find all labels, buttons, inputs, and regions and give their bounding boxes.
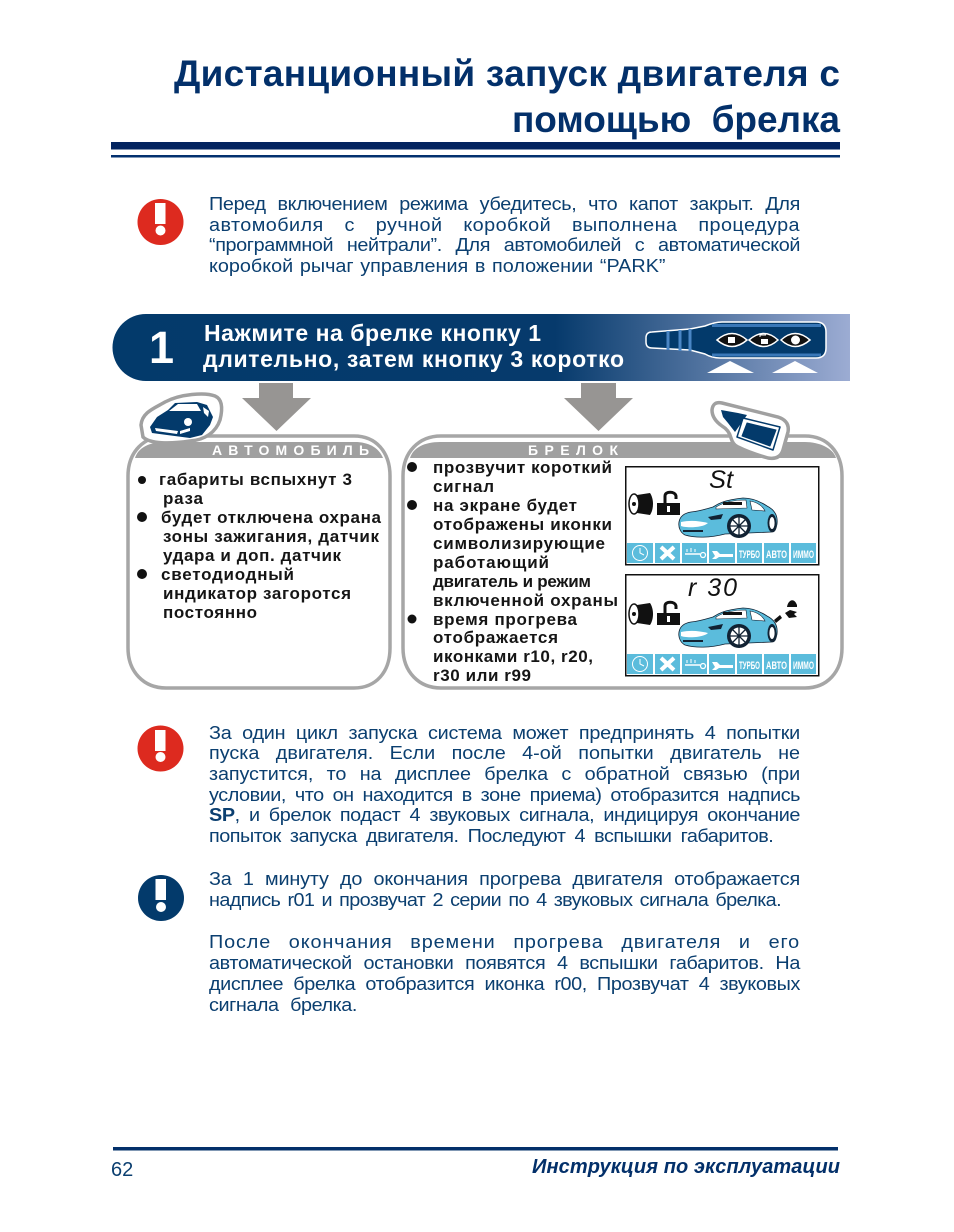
- icon: remote fob: [646, 322, 826, 358]
- bullet list: remote: сигнал: [433, 477, 494, 496]
- title: Дистанционный запуск двигателя с: [174, 53, 840, 94]
- paragraph: start attempts: пуска двигателя. Если после 4-ой попытки двигатель не: [209, 743, 800, 763]
- bullet list: remote: на экране будет: [433, 496, 577, 515]
- bullet list: remote: иконками r10, r20,: [433, 647, 593, 666]
- bullet list: car: будет отключена охрана: [161, 508, 382, 527]
- panel heading: АВТОМОБИЛЬ: [212, 442, 369, 458]
- bullet list: remote: символизирующие: [433, 534, 605, 553]
- paragraph: start attempts: За один цикл запуска система может предпринять 4 попытки: [209, 723, 800, 743]
- paragraph: end of warm-up: [209, 932, 800, 1015]
- step instruction: Нажмите на брелке кнопку 1: [204, 320, 541, 346]
- icon: car badge: [141, 394, 222, 443]
- paragraph: start attempts: попыток запуска двигателя. Последуют 4 вспышки габаритов.: [209, 826, 773, 846]
- paragraph: one minute warning: надпись r01 и прозвучат 2 серии по 4 звуковых сигнала брелка.: [209, 890, 781, 910]
- bullet list: car: удара и доп. датчик: [163, 546, 341, 565]
- panel heading: БРЕЛОК: [528, 442, 618, 458]
- bullet list: remote: [407, 458, 618, 685]
- display: St mode: St: [709, 466, 734, 494]
- display: r 30 mode: [626, 574, 819, 676]
- paragraph: safety note: Перед включением режима убедитесь, что капот закрыт. Для: [209, 194, 800, 214]
- icon: fob badge: [712, 403, 788, 458]
- button pointers: [707, 361, 818, 373]
- bullet list: remote: r30 или r99: [433, 666, 531, 685]
- arrow: to car panel: [242, 383, 311, 431]
- paragraph: end of warm-up: дисплее брелка отобразится иконка r00, Прозвучат 4 звуковых: [209, 974, 800, 994]
- paragraph: start attempts: условии, что он находится в зоне приема) отобразится надпись: [209, 785, 800, 805]
- bullet list: car: светодиодный: [161, 565, 294, 584]
- step instruction: [203, 320, 624, 372]
- paragraph: end of warm-up: автоматической остановки появятся 4 вспышки габаритов. На: [209, 953, 800, 973]
- bullet list: car: раза: [163, 489, 204, 508]
- paragraph: safety note: “программной нейтрали”. Для автомобилей с автоматической: [209, 235, 800, 255]
- display: St mode: [626, 466, 819, 565]
- paragraph: safety note: автомобиля с ручной коробкой выполнена процедура: [209, 215, 800, 235]
- bullet list: car: индикатор загоротся: [163, 584, 351, 603]
- title: [174, 53, 840, 140]
- step 1 banner: [112, 314, 850, 381]
- bullet list: remote: работающий: [433, 553, 549, 572]
- bullet list: remote: включенной охраны: [433, 591, 618, 610]
- bullet list: car: габариты вспыхнут 3: [159, 470, 352, 489]
- paragraph: safety note: коробкой рычаг управления в положении “PARK”: [209, 256, 666, 276]
- bullet list: remote: отображается: [433, 628, 558, 647]
- paragraph: one minute warning: [209, 869, 800, 910]
- title: помощью брелка: [512, 99, 840, 140]
- display: r 30 mode: r 30: [688, 574, 737, 602]
- footer: [111, 1147, 840, 1181]
- bullet list: car: зоны зажигания, датчик: [163, 527, 379, 546]
- footer caption: Инструкция по эксплуатации: [532, 1156, 840, 1178]
- paragraph: start attempts: [209, 723, 800, 846]
- bullet list: remote: прозвучит короткий: [433, 458, 612, 477]
- paragraph: end of warm-up: После окончания времени прогрева двигателя и его: [209, 932, 800, 952]
- paragraph: start attempts: SP, и брелок подаст 4 звуковых сигнала, индицируя окончание: [209, 805, 800, 825]
- paragraph: start attempts: запустится, то на дисплее брелка с обратной связью (при: [209, 764, 800, 784]
- bullet list: remote: время прогрева: [433, 610, 578, 629]
- page number: 62: [111, 1159, 133, 1181]
- bullet list: remote: отображены иконки: [433, 515, 612, 534]
- paragraph: one minute warning: За 1 минуту до окончания прогрева двигателя отображается: [209, 869, 800, 889]
- panel: car: [128, 436, 390, 688]
- bullet list: car: постоянно: [163, 603, 257, 622]
- panel: remote: [403, 436, 842, 688]
- step instruction: длительно, затем кнопку 3 коротко: [203, 346, 624, 372]
- icon: red warning 1: [138, 199, 184, 245]
- arrow: to fob panel: [564, 383, 633, 431]
- paragraph: safety note: [209, 194, 800, 276]
- bullet list: remote: двигатель и режим: [433, 572, 591, 591]
- paragraph: end of warm-up: сигнала брелка.: [209, 995, 357, 1015]
- icon: red warning 2: [138, 726, 184, 772]
- bullet list: car: [137, 470, 382, 622]
- icon: navy notice: [138, 875, 184, 921]
- step number: 1: [149, 322, 174, 373]
